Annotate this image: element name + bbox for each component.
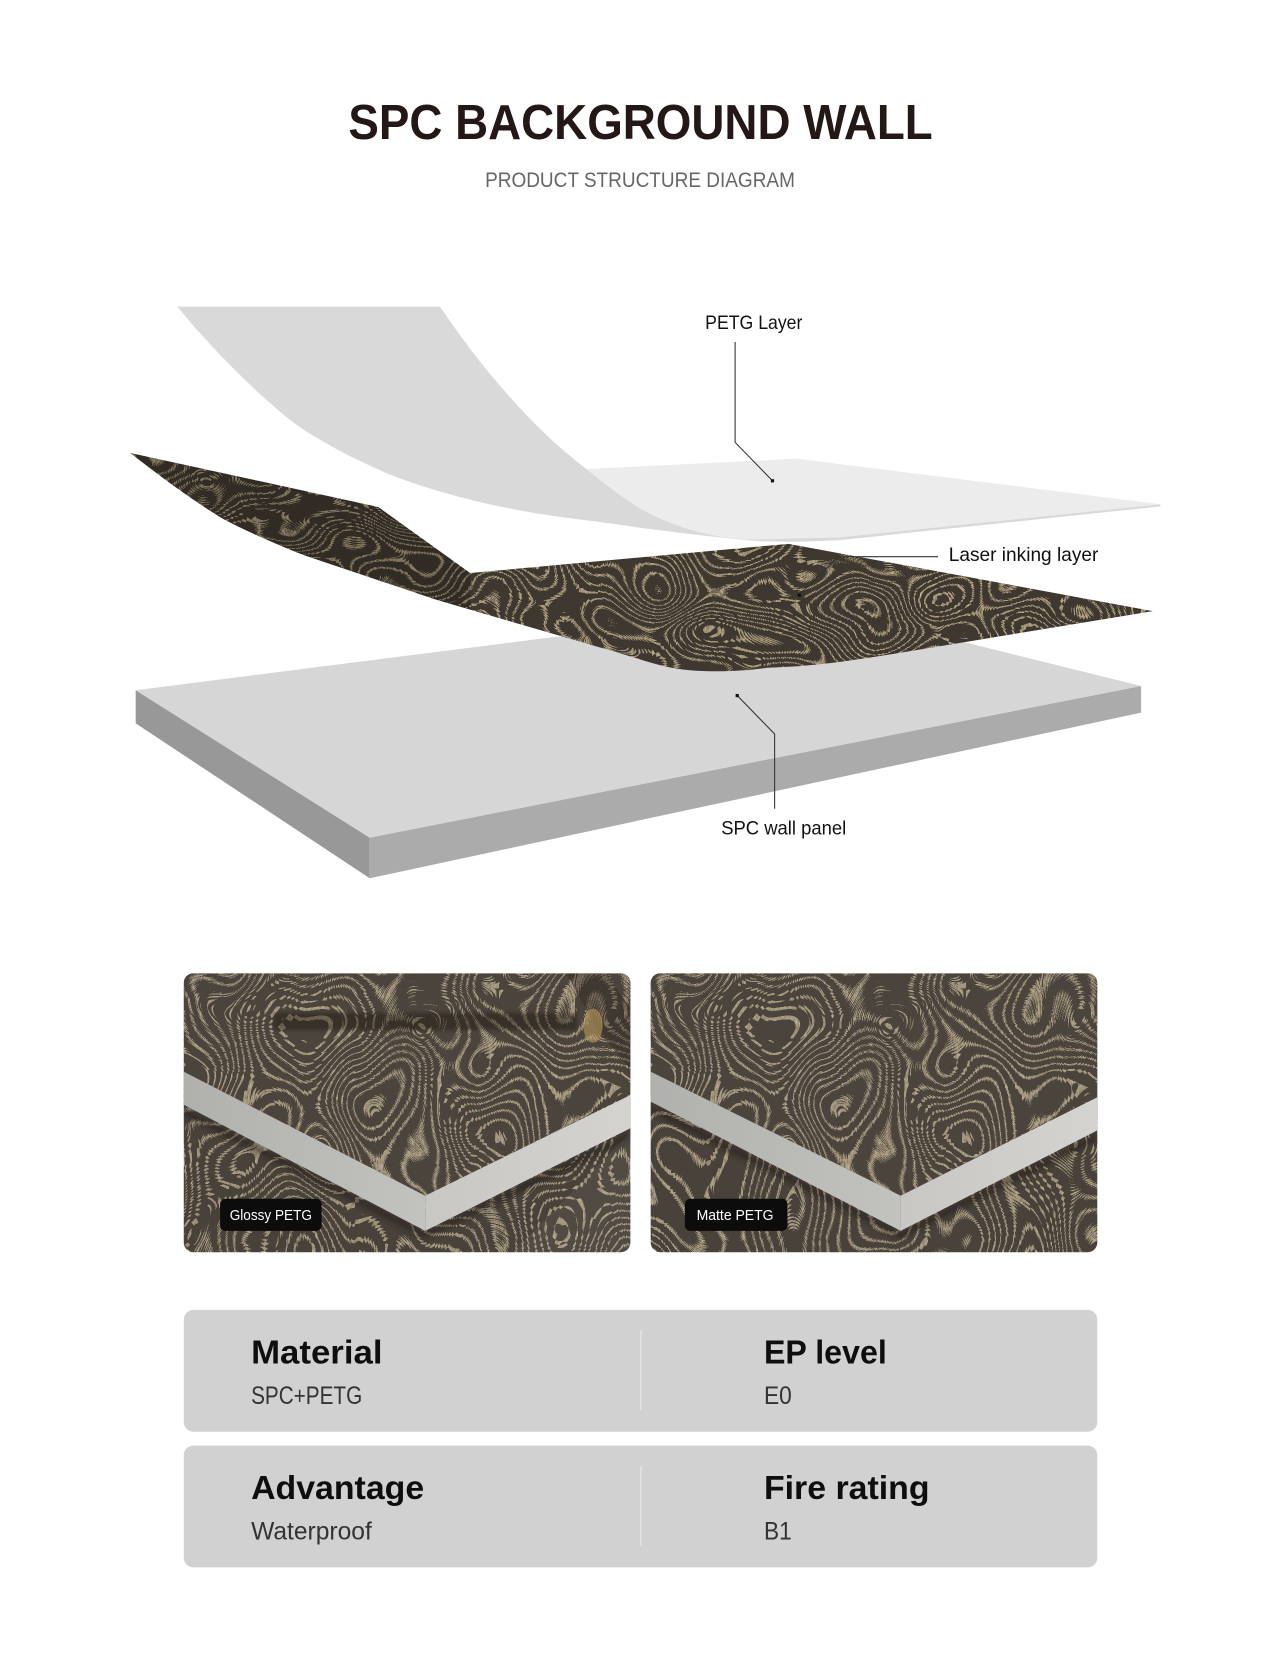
panel: matte PETG sample [651,973,1097,1252]
spec: fire rating [764,1470,930,1546]
callout: PETG layer: PETG Layer [705,313,803,334]
exploded layer diagram [123,307,1160,878]
spec: fire rating: Fire rating [764,1470,930,1507]
spec: EP level: E0 [764,1383,792,1410]
callout: SPC wall panel: SPC wall panel [721,818,846,839]
panel: material and EP level [184,1310,1097,1432]
title: SPC BACKGROUND WALL [348,96,933,150]
spec: EP level [764,1334,887,1410]
panel: advantage and fire rating [184,1446,1097,1567]
panel: glossy PETG sample [184,973,630,1252]
spec: advantage: Advantage [251,1470,424,1507]
callout: laser inking layer [798,545,1099,597]
spec: advantage: Waterproof [251,1519,372,1546]
label: Matte PETG: Matte PETG [697,1207,774,1224]
callout: laser inking layer: Laser inking layer [949,545,1099,566]
callout: PETG layer [705,313,803,482]
SPC wall panel layer [136,637,1141,878]
subtitle: PRODUCT STRUCTURE DIAGRAM [485,168,795,192]
infographic canvas [130,104,1160,1568]
callout: SPC wall panel [721,694,846,839]
spec: material: Material [251,1334,383,1371]
label: Glossy PETG: Glossy PETG [230,1207,312,1224]
spec: EP level: EP level [764,1334,887,1371]
label: Matte PETG [685,1199,787,1231]
spec: material [251,1334,383,1410]
spec: fire rating: B1 [764,1519,792,1546]
spec: advantage [251,1470,424,1546]
laser inking wood-grain layer [123,449,1159,678]
spec: material: SPC+PETG [251,1383,362,1410]
label: Glossy PETG [220,1199,322,1231]
PETG layer [177,307,1160,542]
